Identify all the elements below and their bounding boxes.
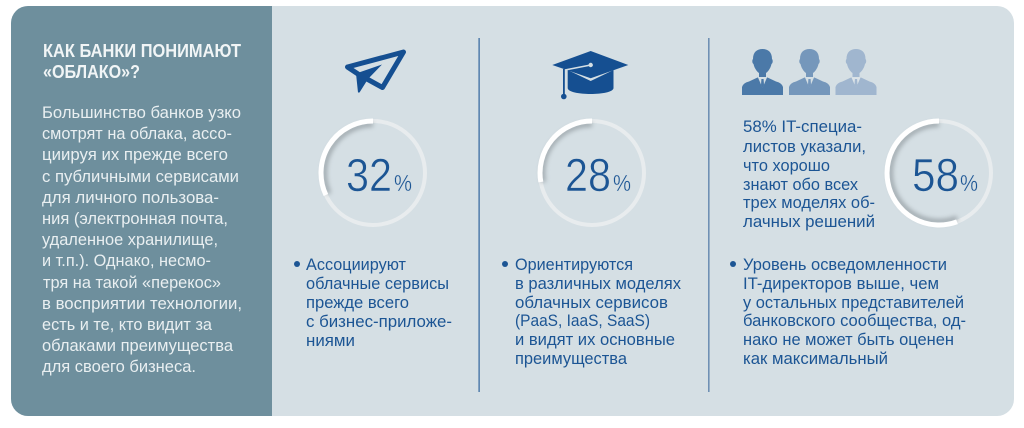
- text block: intro: удаленное хранилище,: [42, 231, 218, 249]
- heading: «ОБЛАКО»?: [43, 62, 140, 82]
- text block: intro: для личного пользова-: [42, 189, 219, 207]
- bullet text: column 1: [294, 256, 452, 350]
- icon: graduation cap: [552, 51, 628, 99]
- bullet text: column 1: ниями: [306, 332, 355, 350]
- text block: IT specialists: листов указали,: [743, 138, 866, 156]
- text block: IT specialists: что хорошо: [743, 157, 830, 175]
- text block: intro: в восприятии технологии,: [42, 295, 242, 313]
- text block: IT specialists: лачных решений: [743, 213, 875, 231]
- icon: paper plane: [348, 52, 404, 92]
- value: 58%: %: [960, 170, 978, 196]
- heading: [43, 41, 241, 82]
- bullet text: column 2: преимущества: [515, 350, 628, 368]
- text block: intro: циируя их прежде всего: [42, 146, 228, 164]
- bullet text: column 2: (PaaS, IaaS, SaaS): [515, 312, 650, 330]
- bullet text: column 3: Уровень осведомленности: [743, 256, 947, 274]
- bullet text: column 2: в различных моделях: [515, 275, 682, 293]
- text block: IT specialists: 58% IT-специа-: [743, 118, 862, 136]
- heading: КАК БАНКИ ПОНИМАЮТ: [43, 41, 241, 61]
- chart: ring 58%: [887, 121, 991, 225]
- bullet text: column 3: как максимальный: [743, 350, 888, 368]
- bullet text: column 1: Ассоциируют: [306, 256, 406, 274]
- value: 28%: %: [613, 170, 631, 196]
- text block: intro: и т.п.). Однако, несмо-: [42, 252, 211, 270]
- chart: ring 32%: [321, 121, 425, 225]
- value: 32%: %: [394, 170, 412, 196]
- bullet text: column 2: облачных сервисов: [515, 294, 668, 312]
- text block: intro: Большинство банков узко: [42, 104, 241, 122]
- value: 58%: 58: [912, 149, 959, 201]
- value: 32%: 32: [346, 149, 392, 201]
- chart: ring 28%: [540, 121, 644, 225]
- bullet text: column 2: [502, 256, 682, 368]
- bullet text: column 1: облачные сервисы: [306, 275, 449, 293]
- bullet text: column 2: и видят их основные: [515, 331, 675, 349]
- text block: intro: облаками преимущества: [42, 337, 234, 355]
- text block: IT specialists: [743, 118, 875, 231]
- divider: column 1-2: [478, 38, 480, 392]
- bullet text: column 2: Ориентируются: [515, 256, 633, 274]
- person dark: [742, 49, 783, 95]
- text block: IT specialists: знают обо всех: [743, 176, 859, 194]
- bullet text: column 3: [730, 256, 966, 368]
- bullet text: column 3: банковского сообщества, од-: [743, 312, 966, 330]
- icon: three people: [742, 49, 876, 95]
- bullet text: column 3: у остальных представителей: [743, 294, 964, 312]
- text block: intro: ния (электронная почта,: [42, 210, 228, 228]
- person medium: [789, 49, 830, 95]
- person light: [836, 49, 876, 95]
- text block: intro: для своего бизнеса.: [42, 358, 196, 376]
- bullet text: column 1: прежде всего: [306, 294, 409, 312]
- text block: IT specialists: трех моделях об-: [743, 194, 875, 212]
- text block: intro: с публичными сервисами: [42, 168, 239, 186]
- text block: intro: [42, 104, 242, 376]
- text block: intro: тря на такой «перекос»: [43, 274, 221, 292]
- text block: intro: есть и те, кто видит за: [42, 316, 213, 334]
- value: 28%: 28: [565, 149, 611, 201]
- divider: column 2-3: [708, 38, 710, 392]
- bullet text: column 3: IT-директоров выше, чем: [743, 275, 939, 293]
- text block: intro: смотрят на облака, ассо-: [42, 125, 232, 143]
- bullet text: column 3: нако не может быть оценен: [743, 331, 954, 349]
- bullet text: column 1: с бизнес-приложе-: [306, 313, 452, 331]
